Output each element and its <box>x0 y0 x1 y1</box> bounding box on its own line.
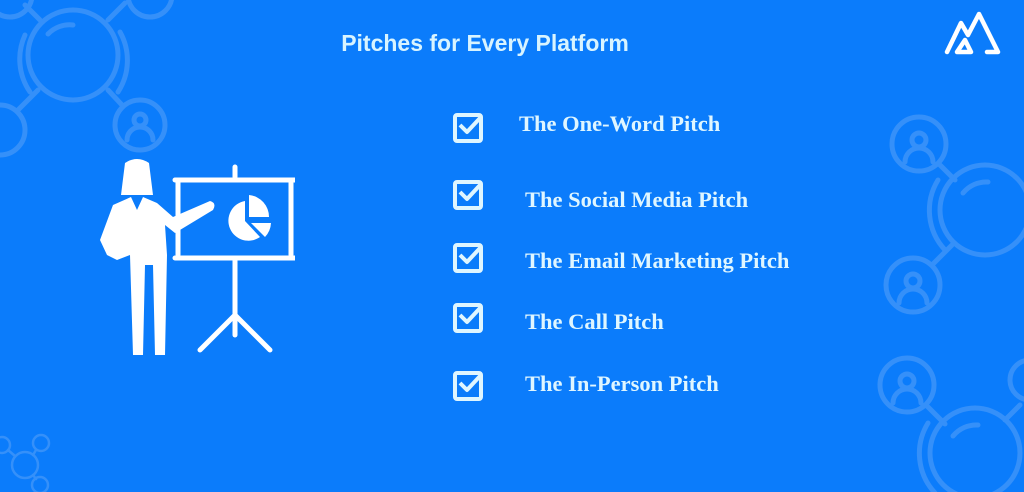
item 5: The In-Person Pitch <box>525 371 719 396</box>
presenter illustration <box>100 159 295 355</box>
item 4: The Call Pitch <box>525 309 664 334</box>
checklist <box>453 113 483 401</box>
item 1: The One-Word Pitch <box>519 111 720 136</box>
item 3: The Email Marketing Pitch <box>525 248 789 273</box>
item 2: The Social Media Pitch <box>525 187 748 212</box>
logo <box>944 12 1000 54</box>
title: Pitches for Every Platform <box>341 30 629 56</box>
